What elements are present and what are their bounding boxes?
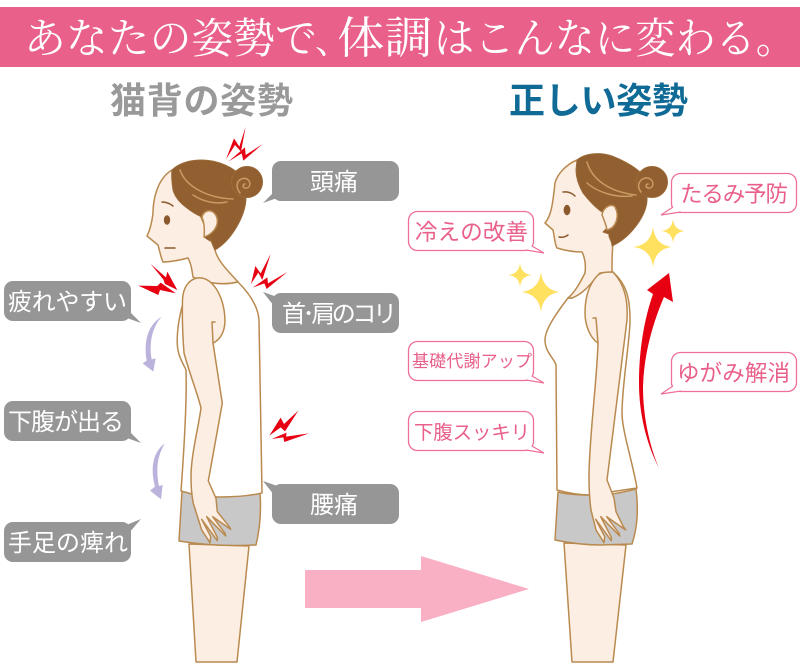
- callout: prevent sagging: たるみ予防: [680, 182, 788, 207]
- callout: metabolism up: [408, 342, 544, 383]
- arrow: purple down 1: [143, 317, 162, 372]
- icon: pain bolt shoulder: [251, 254, 287, 289]
- icon: pain bolt chest: [138, 264, 177, 295]
- icon: sparkles upper right: [633, 219, 685, 267]
- callout: easily tired: [4, 281, 141, 323]
- callout: better circulation: 冷えの改善: [415, 220, 528, 245]
- callout: better circulation: [408, 212, 544, 253]
- callout: neck and shoulder stiffness: 首･肩のコリ: [282, 301, 397, 328]
- arrow: pink transition: [305, 556, 529, 622]
- heading: correct posture: 正しい姿勢: [509, 80, 688, 121]
- title banner: 体調: [337, 14, 432, 63]
- arrow: red upward curve: [639, 273, 673, 468]
- callout: prevent sagging: [661, 174, 796, 215]
- icon: pain bolt head: [226, 127, 263, 162]
- callout: metabolism up: 基礎代謝アップ: [412, 352, 532, 371]
- callout: belly sticks out: 下腹が出る: [8, 409, 124, 436]
- title banner: [0, 7, 800, 67]
- title banner: 、: [315, 21, 351, 61]
- callout: flat belly: 下腹スッキリ: [414, 422, 530, 444]
- icon: pain bolt lower back: [269, 411, 309, 442]
- title banner: あなたの姿勢で: [24, 17, 317, 63]
- arrow: purple down 2: [150, 443, 165, 499]
- callout: belly sticks out: [4, 401, 141, 443]
- figure: upright woman: [545, 154, 668, 662]
- callout: low back pain: 腰痛: [310, 492, 358, 519]
- heading: bad posture: 猫背の姿勢: [110, 80, 293, 121]
- callout: neck and shoulder stiffness: [263, 292, 399, 333]
- callout: headache: [263, 161, 399, 203]
- icon: sparkles left: [508, 263, 560, 312]
- callout: fix distortion: ゆがみ解消: [677, 361, 790, 386]
- callout: easily tired: 疲れやすい: [8, 289, 127, 316]
- figure: hunched woman: [147, 160, 262, 662]
- callout: numb limbs: 手足の痺れ: [8, 530, 128, 557]
- callout: numb limbs: [4, 519, 141, 562]
- callout: flat belly: [408, 412, 544, 453]
- callout: fix distortion: [661, 352, 796, 394]
- callout: headache: 頭痛: [310, 169, 358, 196]
- callout: low back pain: [263, 481, 399, 524]
